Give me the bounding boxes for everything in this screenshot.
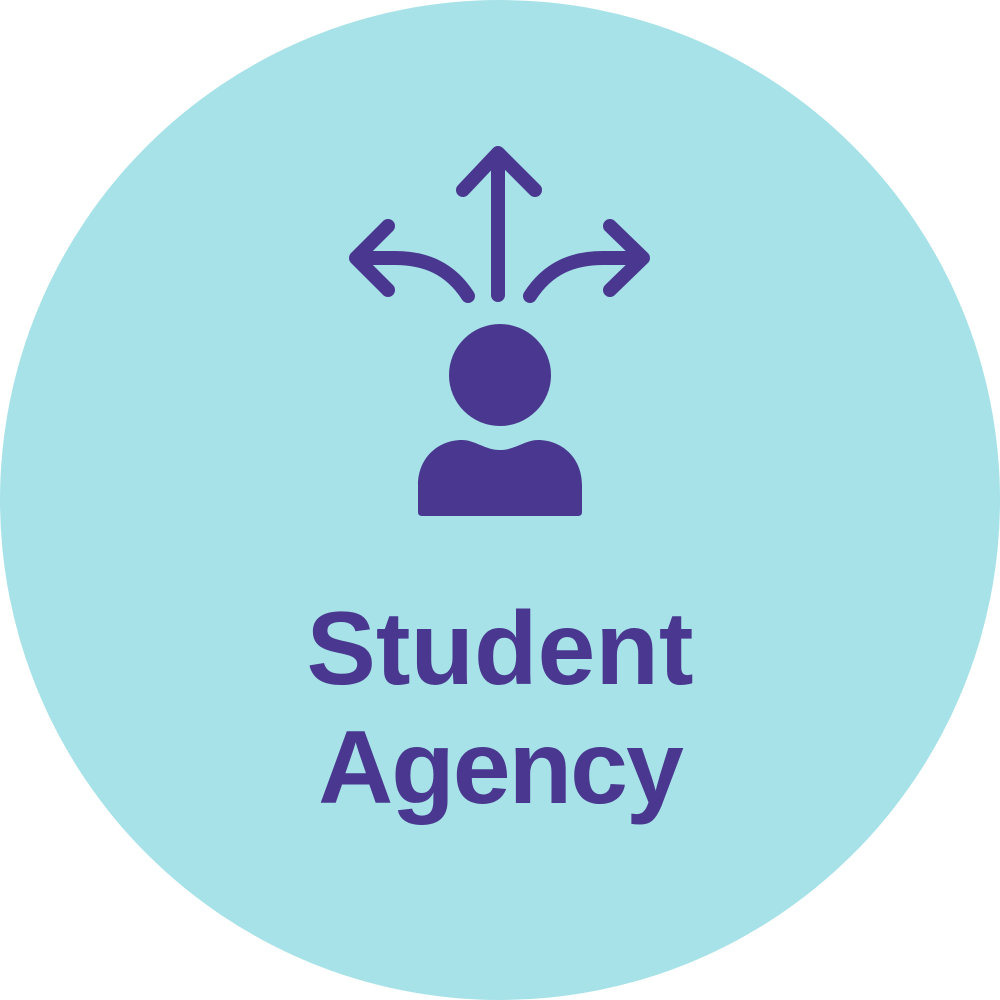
title: Agency (318, 710, 682, 826)
title: Student (306, 591, 694, 707)
title (306, 591, 694, 826)
